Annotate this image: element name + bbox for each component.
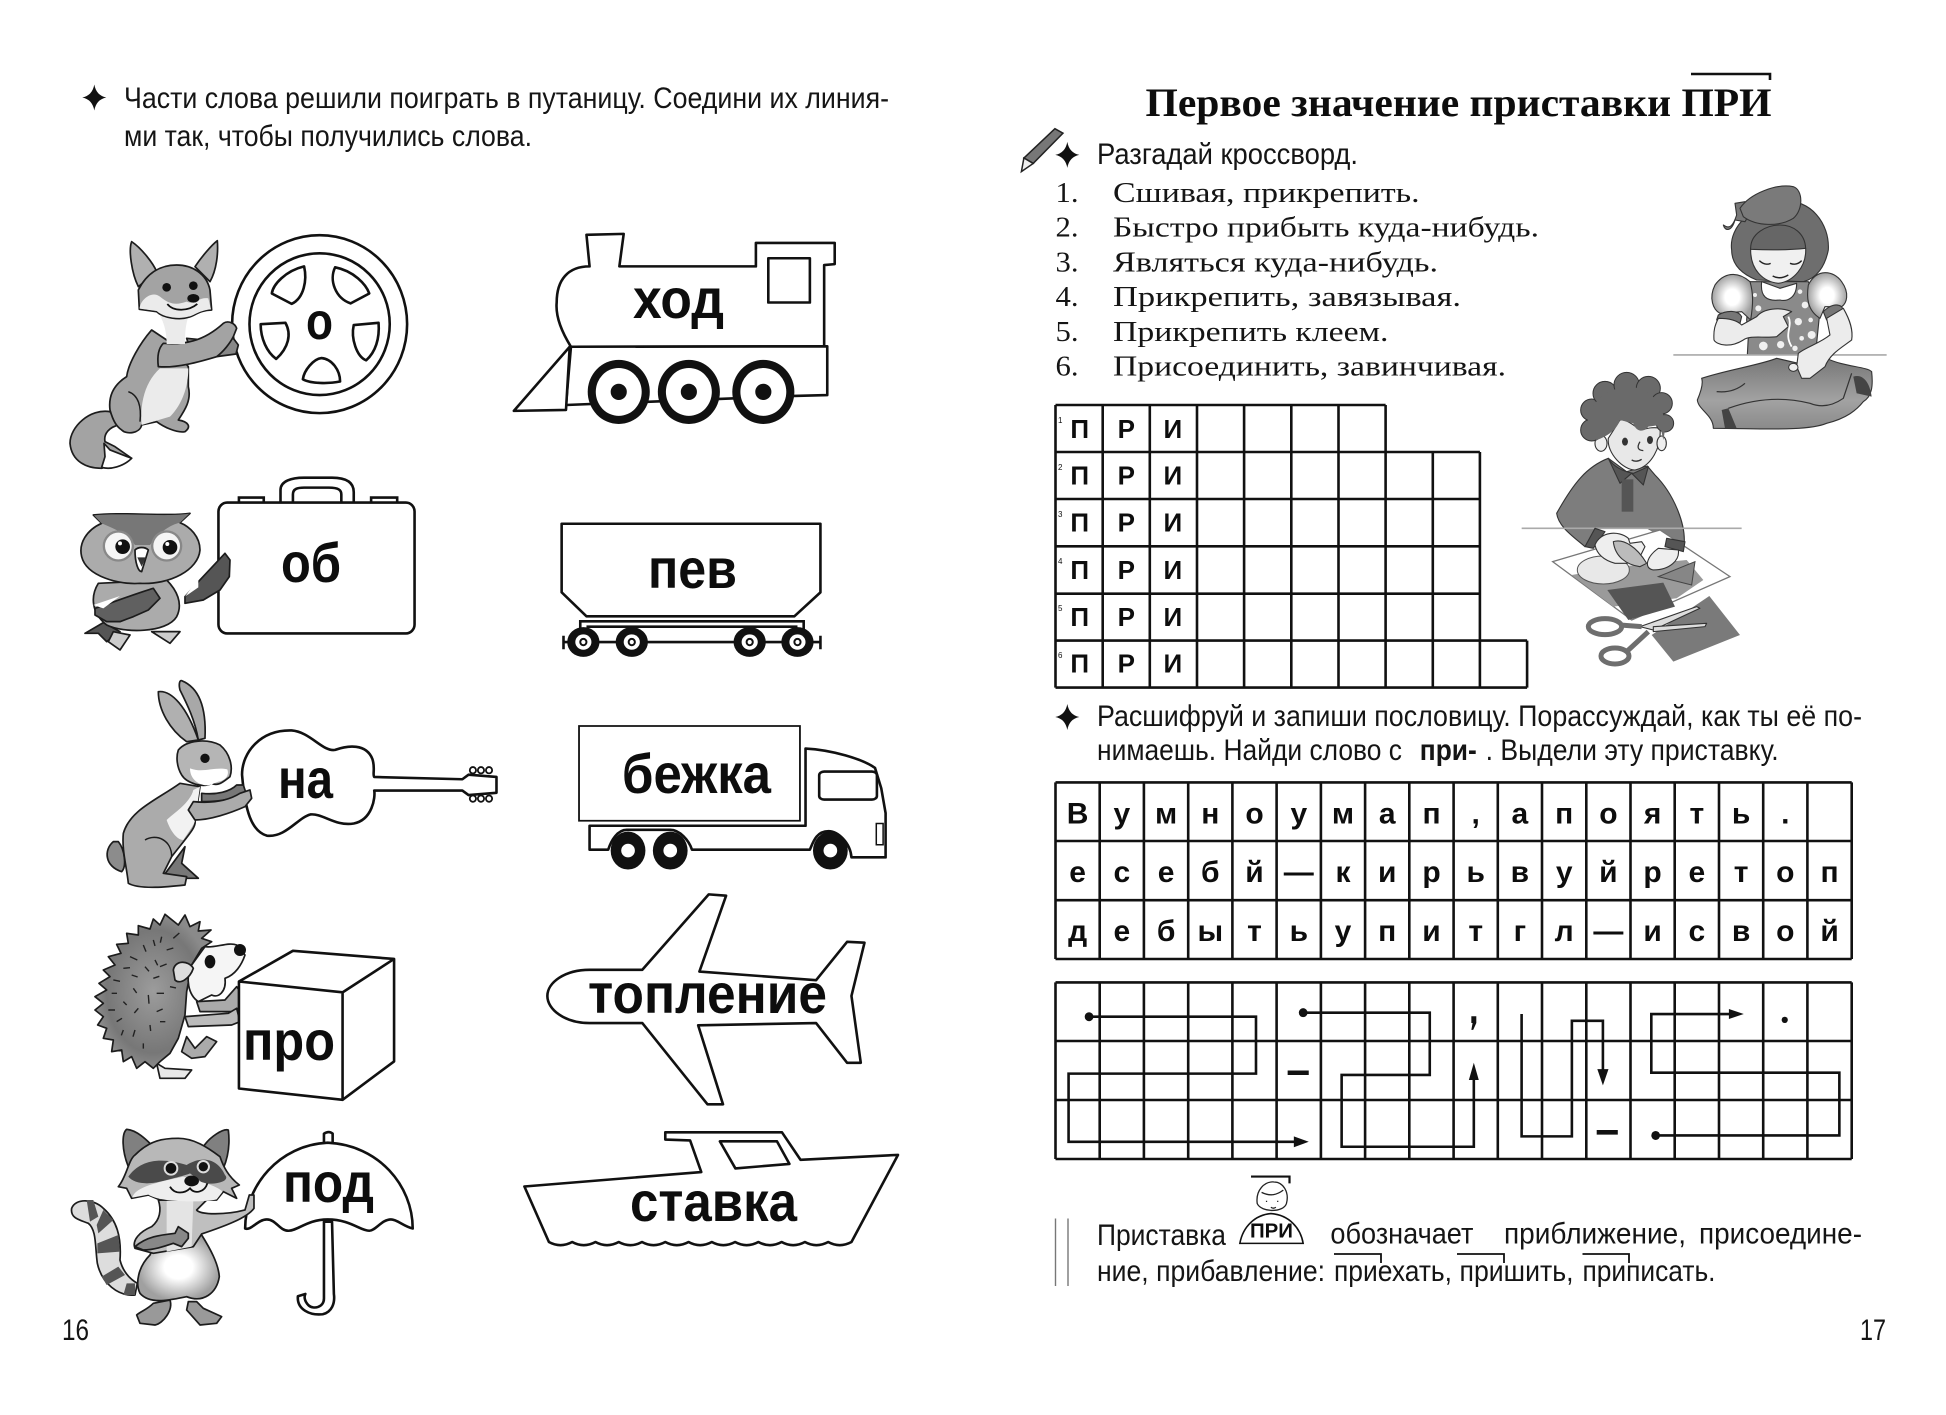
crossword grid: П — [1070, 602, 1089, 632]
crossword grid: И — [1163, 414, 1182, 444]
letter cipher grid: к — [1335, 856, 1351, 889]
word part: о: о — [306, 293, 333, 351]
proverb instruction: нимаешь. Найди слово с — [1097, 734, 1402, 767]
word part: на: на — [278, 747, 334, 810]
icon: prefix mascot — [1240, 1177, 1303, 1243]
crossword grid: 5 — [1058, 604, 1063, 613]
proverb instruction: при- — [1420, 734, 1477, 767]
icon: prefix mascot: ПРИ — [1250, 1220, 1293, 1242]
proverb instruction: Расшифруй и запиши пословицу. Порассуждай, как ты её по- — [1097, 700, 1862, 733]
letter cipher grid: , — [1472, 798, 1480, 830]
crossword grid: Р — [1118, 649, 1135, 679]
crossword grid: 6 — [1058, 651, 1063, 660]
letter cipher grid: п — [1821, 856, 1839, 889]
icon: locomotive — [514, 234, 835, 424]
crossword clues list: Являться куда-нибудь. — [1113, 246, 1438, 278]
page number 16: 16 — [62, 1314, 89, 1347]
crossword clues list: Быстро прибыть куда-нибудь. — [1113, 212, 1539, 244]
letter cipher grid: н — [1201, 798, 1219, 830]
rule text: ние, прибавление: — [1097, 1255, 1325, 1288]
letter cipher grid: ь — [1290, 915, 1308, 948]
crossword grid: И — [1163, 555, 1182, 585]
letter cipher grid: ы — [1197, 915, 1223, 948]
word part: ставка: ставка — [630, 1170, 798, 1233]
icon: star bullet — [82, 84, 106, 110]
letter cipher grid: . — [1781, 798, 1789, 830]
letter cipher grid: е — [1158, 856, 1174, 889]
crossword clues list: 3. — [1056, 246, 1078, 278]
crossword grid: П — [1070, 414, 1089, 444]
crossword grid: 1 — [1058, 416, 1063, 425]
letter cipher grid: т — [1468, 915, 1483, 948]
crossword grid: П — [1070, 460, 1089, 490]
crossword grid: И — [1163, 507, 1182, 537]
icon: freight wagon — [562, 524, 820, 657]
rule text: приближение, — [1504, 1217, 1686, 1250]
illustration: boy gluing — [1522, 372, 1742, 664]
proverb instruction — [1097, 700, 1862, 767]
letter cipher grid: р — [1422, 856, 1441, 889]
instruction text — [124, 82, 889, 153]
letter cipher grid: — — [1593, 915, 1623, 948]
letter cipher grid: ь — [1466, 856, 1485, 889]
word part: ход: ход — [633, 267, 724, 330]
crossword grid — [1056, 405, 1527, 688]
crossword grid: Р — [1118, 460, 1135, 490]
letter cipher grid: й — [1245, 856, 1264, 889]
letter cipher grid: — — [1284, 856, 1314, 889]
path reading grid — [1056, 982, 1852, 1159]
letter cipher grid: В — [1067, 798, 1088, 830]
letter cipher grid: о — [1776, 856, 1794, 889]
letter cipher grid: т — [1247, 915, 1262, 948]
rule text: Приставка — [1097, 1219, 1226, 1252]
word part: об: об — [281, 531, 341, 594]
rule text: пришить, — [1460, 1255, 1574, 1288]
letter cipher grid: п — [1378, 915, 1396, 948]
crossword grid: И — [1163, 649, 1182, 679]
icon: pencil — [1021, 129, 1063, 172]
word part: пев: пев — [648, 537, 737, 600]
instruction text: ми так, чтобы получились слова. — [124, 120, 532, 153]
letter cipher grid: у — [1290, 798, 1307, 830]
letter cipher grid: а — [1512, 798, 1529, 830]
letter cipher grid: в — [1732, 915, 1750, 948]
letter cipher grid: й — [1599, 856, 1618, 889]
letter cipher grid: е — [1689, 856, 1705, 889]
icon: rabbit with guitar — [107, 681, 496, 887]
letter cipher grid: л — [1555, 915, 1574, 948]
crossword grid: П — [1070, 507, 1089, 537]
icon: truck — [579, 726, 886, 870]
crossword clues list: 4. — [1056, 281, 1078, 313]
crossword clues list: Прикрепить клеем. — [1113, 316, 1388, 348]
letter cipher grid — [1056, 782, 1852, 959]
crossword grid: 3 — [1058, 510, 1063, 519]
rule text: присоедине- — [1699, 1217, 1862, 1250]
letter cipher grid: в — [1511, 856, 1529, 889]
crossword grid: Р — [1118, 555, 1135, 585]
rule box — [1056, 1177, 1862, 1288]
route arrows — [1069, 1008, 1839, 1147]
letter cipher grid: г — [1514, 915, 1526, 948]
letter cipher grid: б — [1157, 915, 1175, 948]
crossword grid: 4 — [1058, 557, 1063, 566]
icon: hedgehog with box — [95, 914, 394, 1100]
rule text: приехать, — [1334, 1255, 1452, 1288]
icon: owl with suitcase — [81, 478, 415, 650]
rule text — [1097, 1217, 1862, 1288]
letter cipher grid: д — [1068, 915, 1087, 948]
crossword clues list: Прикрепить, завязывая. — [1113, 281, 1461, 313]
word part: бежка: бежка — [622, 742, 772, 805]
crossword clues list: 1. — [1056, 177, 1078, 209]
letter cipher grid: п — [1555, 798, 1573, 830]
crossword clues list: Присоединить, завинчивая. — [1113, 351, 1506, 383]
icon: star bullet — [1055, 704, 1079, 730]
icon: fox with wheel — [70, 235, 407, 468]
icon: star bullet — [1055, 142, 1079, 168]
title: Первое значение приставки ПРИ — [1146, 80, 1772, 125]
letter cipher grid: и — [1378, 856, 1396, 889]
crossword grid: Р — [1118, 414, 1135, 444]
letter cipher grid: м — [1332, 798, 1354, 830]
letter cipher grid: у — [1556, 856, 1573, 889]
letter cipher grid: у — [1335, 915, 1352, 948]
illustration: girl sewing — [1673, 186, 1887, 429]
letter cipher grid: й — [1820, 915, 1839, 948]
icon: boat — [524, 1132, 898, 1245]
icon: raccoon with umbrella — [71, 1129, 413, 1325]
letter cipher grid: и — [1643, 915, 1662, 948]
crossword clues list: 2. — [1056, 212, 1078, 244]
crossword grid: 2 — [1058, 463, 1063, 472]
letter cipher grid: и — [1422, 915, 1441, 948]
instruction text: Части слова решили поиграть в путаницу. Соедини их линия- — [124, 82, 889, 115]
proverb instruction: . Выдели эту приставку. — [1486, 734, 1779, 767]
word part: под: под — [283, 1151, 374, 1214]
crossword grid: Р — [1118, 602, 1135, 632]
letter cipher grid: р — [1643, 856, 1662, 889]
letter cipher grid: е — [1113, 915, 1130, 948]
crossword clues list: 6. — [1056, 351, 1078, 383]
panel: right page — [1021, 74, 1887, 1347]
crossword instruction: Разгадай кроссворд. — [1097, 138, 1358, 171]
letter cipher grid: т — [1690, 798, 1704, 830]
letter cipher grid: о — [1776, 915, 1794, 948]
crossword grid: П — [1070, 649, 1089, 679]
rule text: обозначает — [1330, 1217, 1474, 1250]
rule text: приписать. — [1582, 1255, 1716, 1288]
crossword clues list — [1056, 177, 1539, 383]
crossword grid: П — [1070, 555, 1089, 585]
icon: airplane — [547, 894, 864, 1104]
crossword clues list: Сшивая, прикрепить. — [1113, 177, 1420, 209]
page number 17: 17 — [1860, 1314, 1886, 1347]
letter cipher grid: у — [1113, 798, 1130, 830]
letter cipher grid: е — [1069, 856, 1086, 889]
letter cipher grid: с — [1689, 915, 1705, 948]
letter cipher grid: м — [1155, 798, 1177, 830]
letter cipher grid: а — [1379, 798, 1396, 830]
letter cipher grid: о — [1245, 798, 1264, 830]
letter cipher grid: о — [1599, 798, 1618, 830]
word part: про: про — [243, 1009, 335, 1072]
letter cipher grid: б — [1201, 856, 1220, 889]
letter cipher grid: с — [1113, 856, 1130, 889]
panel: left page — [62, 82, 898, 1347]
crossword grid: И — [1163, 602, 1182, 632]
letter cipher grid: я — [1643, 798, 1661, 830]
crossword grid: Р — [1118, 507, 1135, 537]
word part: топление: топление — [588, 962, 827, 1025]
letter cipher grid: т — [1734, 856, 1748, 889]
letter cipher grid: ь — [1732, 798, 1750, 830]
crossword clues list: 5. — [1056, 316, 1078, 348]
crossword grid: И — [1163, 460, 1182, 490]
letter cipher grid: п — [1422, 798, 1441, 830]
